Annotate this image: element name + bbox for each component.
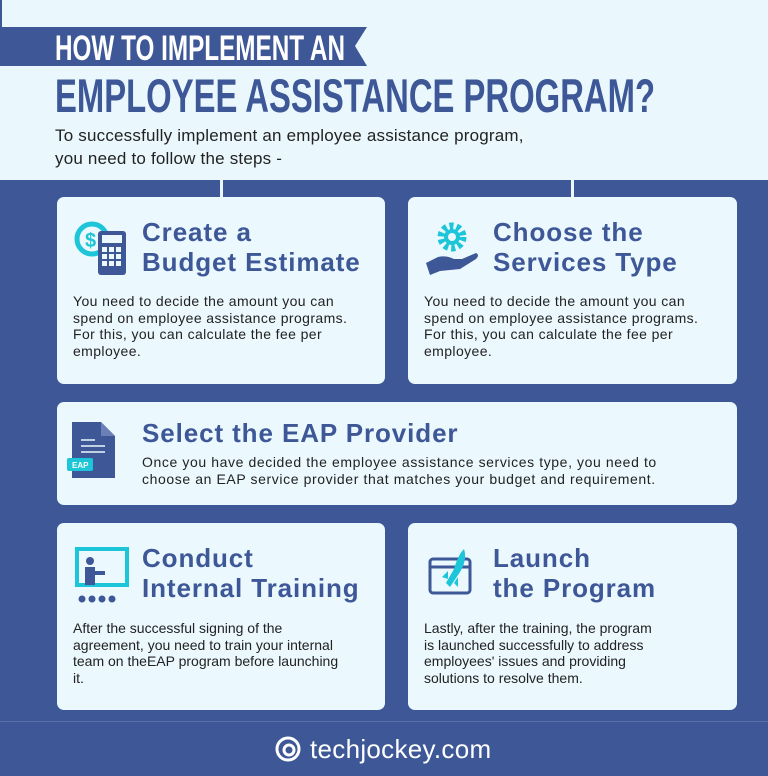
text: Lastly, after the training, the program bbox=[424, 620, 652, 636]
icon: EAP document bbox=[67, 422, 115, 478]
text: employees' issues and providing bbox=[424, 653, 626, 669]
footer logo: techjockey.com bbox=[310, 734, 491, 764]
intro text: you need to follow the steps - bbox=[55, 149, 282, 168]
icon: EAP document: EAP bbox=[72, 461, 89, 470]
text: For this, you can calculate the fee per bbox=[424, 326, 673, 342]
text bbox=[73, 293, 347, 359]
text: employee. bbox=[424, 342, 492, 358]
text: solutions to resolve them. bbox=[424, 670, 583, 686]
heading: Budget Estimate bbox=[142, 247, 361, 277]
heading: Create a bbox=[142, 217, 252, 247]
title banner: HOW TO IMPLEMENT AN bbox=[55, 29, 345, 68]
panel: select EAP provider bbox=[57, 402, 737, 505]
text: choose an EAP service provider that matches your budget and requirement. bbox=[142, 470, 656, 486]
heading bbox=[142, 217, 361, 277]
text: agreement, you need to train your internal bbox=[73, 636, 333, 652]
heading: the Program bbox=[493, 573, 656, 603]
panel: launch the program bbox=[408, 523, 737, 710]
icon: rocket window bbox=[428, 549, 472, 594]
text: is launched successfully to address bbox=[424, 636, 643, 652]
text: employee. bbox=[73, 342, 141, 358]
icon: calculator: $ bbox=[85, 230, 96, 252]
heading: Conduct bbox=[142, 543, 254, 573]
icon: calculator bbox=[74, 222, 126, 275]
text bbox=[142, 454, 657, 487]
header area bbox=[0, 0, 768, 180]
text: After the successful signing of the bbox=[73, 620, 282, 636]
heading: Select the EAP Provider bbox=[142, 418, 458, 448]
intro text: To successfully implement an employee assistance program, bbox=[55, 126, 524, 145]
text bbox=[424, 293, 698, 359]
text: spend on employee assistance programs. bbox=[424, 310, 698, 326]
text: Once you have decided the employee assistance services type, you need to bbox=[142, 454, 657, 470]
text bbox=[424, 620, 652, 686]
panel: conduct internal training bbox=[57, 523, 385, 710]
text bbox=[73, 620, 338, 686]
heading: Services Type bbox=[493, 247, 678, 277]
heading: Launch bbox=[493, 543, 591, 573]
heading bbox=[142, 543, 360, 603]
icon: training board bbox=[75, 547, 129, 602]
text: spend on employee assistance programs. bbox=[73, 310, 347, 326]
text: team on theEAP program before launching bbox=[73, 653, 338, 669]
text: You need to decide the amount you can bbox=[424, 293, 685, 309]
icon: gear hand bbox=[426, 222, 478, 275]
icon: logo bbox=[276, 736, 300, 762]
text: For this, you can calculate the fee per bbox=[73, 326, 322, 342]
title banner bbox=[0, 0, 655, 122]
text: it. bbox=[73, 670, 84, 686]
heading: Internal Training bbox=[142, 573, 360, 603]
panel: choose services type bbox=[408, 197, 737, 384]
heading bbox=[493, 543, 656, 603]
heading bbox=[493, 217, 678, 277]
text: You need to decide the amount you can bbox=[73, 293, 334, 309]
panel: create budget estimate bbox=[57, 197, 385, 384]
heading: Choose the bbox=[493, 217, 644, 247]
intro text bbox=[55, 126, 524, 168]
